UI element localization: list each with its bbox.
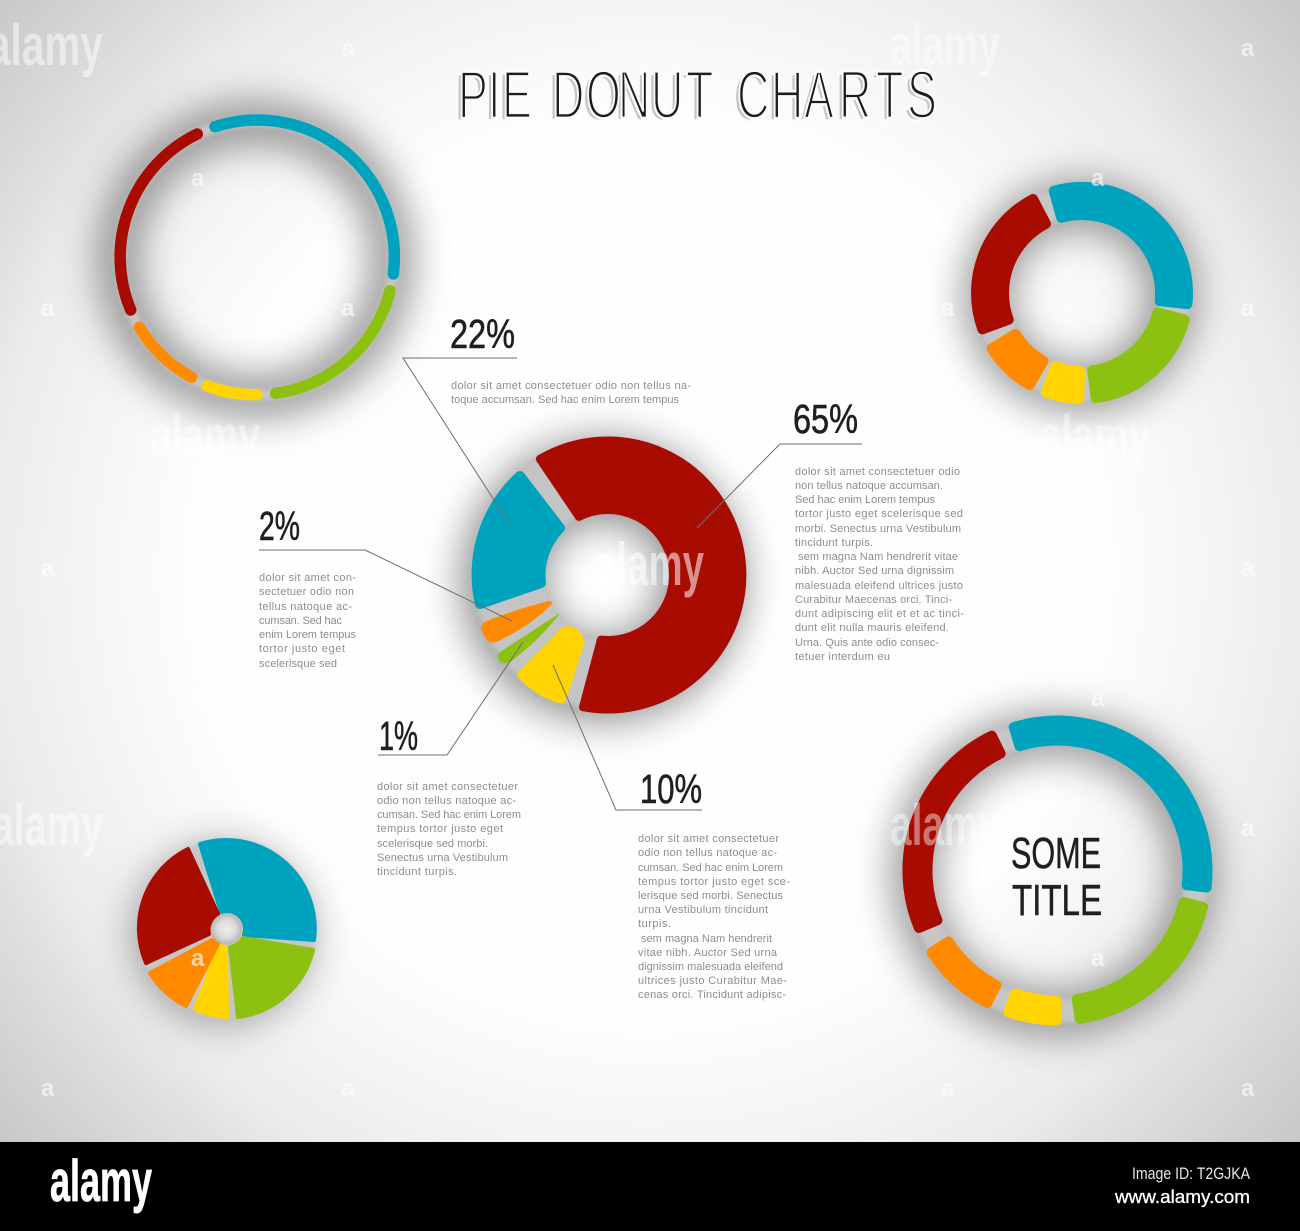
watermarks: a [941, 555, 955, 582]
watermarks: alamy [150, 404, 260, 469]
title: PIE DONUT CHARTS [454, 60, 933, 136]
callout: 2%: tortor justo eget [259, 643, 345, 655]
leader lines [259, 358, 862, 810]
callout: 1%: tempus tortor justo eget [377, 823, 503, 835]
watermarks: alamy [1040, 404, 1150, 469]
callout: 1%: 1% [379, 713, 418, 759]
callout: 10%: odio non tellus natoque ac- [638, 847, 777, 859]
watermarks: a [191, 685, 205, 712]
callout: 10%: 10% [640, 766, 702, 812]
watermarks: a [1241, 815, 1255, 842]
callout: 65%: Curabitur Maecenas orci. Tinci- [795, 594, 952, 606]
image id: Image ID: T2GJKA [1132, 1164, 1251, 1183]
callout: 22%: 22% [450, 311, 515, 357]
callout: 22%: dolor sit amet consectetuer odio non tellus na- [451, 380, 691, 392]
callout: 2%: 2% [259, 503, 300, 549]
callout: 10%: dignissim malesuada eleifend [638, 961, 783, 973]
watermarks: a [41, 295, 55, 322]
pie chart bottom left [133, 840, 316, 1024]
callout: 65%: 65% [793, 396, 858, 442]
watermarks: a [941, 1075, 955, 1102]
footer logo: alamy [50, 1149, 152, 1214]
watermarks: a [341, 815, 355, 842]
callout: 65% [793, 396, 964, 663]
callout: 10%: lerisque sed morbi. Senectus [638, 890, 784, 902]
callout: 1% [377, 713, 521, 878]
watermarks: a [341, 295, 355, 322]
callout: 10%: cenas orci. Tincidunt adipisc- [638, 989, 786, 1001]
callout: 10%: turpis. [638, 918, 671, 930]
callout: 2%: enim Lorem tempus [259, 629, 356, 641]
title: PIE DONUT CHARTS [458, 58, 937, 133]
callout: 65%: Urna. Quis ante odio consec- [795, 637, 939, 649]
donut chart: thin ring top left [118, 120, 394, 397]
watermarks: alamy [890, 793, 1000, 858]
callout: 2% [259, 503, 356, 670]
watermarks: a [1091, 685, 1105, 712]
watermarks: a [341, 35, 355, 62]
segment: yellow 10% [523, 632, 579, 698]
watermarks: a [191, 945, 205, 972]
callout: 1%: Senectus urna Vestibulum [377, 852, 508, 864]
callout: 2%: scelerisque sed [259, 658, 337, 670]
main donut chart [477, 441, 742, 710]
central watermark: alamy [595, 531, 704, 598]
callout: 65%: dolor sit amet consectetuer odio [795, 466, 960, 478]
callout: 10%: vitae nibh. Auctor Sed urna [638, 947, 778, 959]
callout: 1%: scelerisque sed morbi. [377, 838, 488, 850]
watermarks: a [41, 555, 55, 582]
watermarks: a [1241, 295, 1255, 322]
callout: 10%: cumsan. Sed hac enim Lorem [638, 862, 783, 874]
segment: green 1% [498, 613, 560, 664]
callout: 10%: urna Vestibulum tincidunt [638, 904, 768, 916]
callout: 1%: cumsan. Sed hac enim Lorem [377, 809, 521, 821]
callout: 2%: cumsan. Sed hac [259, 615, 342, 627]
callout: 65%: malesuada eleifend ultrices justo [795, 580, 963, 592]
watermarks: a [41, 1075, 55, 1102]
ring centre title [1011, 829, 1102, 925]
callout: 1%: dolor sit amet consectetuer [377, 781, 518, 793]
watermarks: a [191, 165, 205, 192]
callout: 1%: tincidunt turpis. [377, 866, 457, 878]
segment: red 65% [540, 441, 742, 710]
watermarks: a [1241, 35, 1255, 62]
callout: 1%: odio non tellus natoque ac- [377, 795, 516, 807]
callout: 2%: tellus natoque ac- [259, 601, 352, 613]
watermarks: a [1091, 165, 1105, 192]
segment: teal 22% [477, 476, 560, 604]
watermarks: a [1241, 1075, 1255, 1102]
callout: 65%: dunt elit nulla mauris eleifend. [795, 622, 949, 634]
callout: 10%: ultrices justo Curabitur Mae- [638, 975, 787, 987]
donut chart: titled ring bottom right [907, 721, 1207, 1020]
watermarks: alamy [890, 13, 1000, 78]
callout: 2%: sectetuer odio non [259, 586, 354, 598]
callout: 2%: dolor sit amet con- [259, 572, 356, 584]
callout: 10%: sem magna Nam hendrerit [641, 933, 772, 945]
callout: 65%: tetuer interdum eu [795, 651, 890, 663]
watermarks: a [1091, 945, 1105, 972]
ring centre title: SOME [1011, 829, 1101, 878]
callout: 10%: dolor sit amet consectetuer [638, 833, 779, 845]
footer bar [0, 1142, 1300, 1231]
callout: 10% [638, 766, 790, 1001]
callout: 65%: sem magna Nam hendrerit vitae [798, 551, 958, 563]
callout: 65%: morbi. Senectus urna Vestibulum [795, 523, 961, 535]
callout: 65%: nibh. Auctor Sed urna dignissim [795, 565, 954, 577]
callout: 65%: dunt adipiscing elit et et ac tinci- [795, 608, 964, 620]
ring centre title: TITLE [1012, 876, 1102, 925]
watermarks: a [341, 1075, 355, 1102]
callout: 65%: non tellus natoque accumsan. [795, 480, 943, 492]
watermarks: a [941, 295, 955, 322]
callout: 10%: tempus tortor justo eget sce- [638, 876, 790, 888]
callout: 65%: tincidunt turpis. [795, 537, 873, 549]
website: www.alamy.com [1114, 1187, 1250, 1207]
callout: 22%: toque accumsan. Sed hac enim Lorem tempus [451, 394, 680, 406]
donut chart: medium ring top right [976, 187, 1188, 399]
callout: 65%: Sed hac enim Lorem tempus [795, 494, 936, 506]
callout: 22% [450, 311, 691, 406]
callout: 65%: tortor justo eget scelerisque sed [795, 508, 963, 520]
segment: orange 2% [483, 603, 550, 641]
watermarks: a [1241, 555, 1255, 582]
